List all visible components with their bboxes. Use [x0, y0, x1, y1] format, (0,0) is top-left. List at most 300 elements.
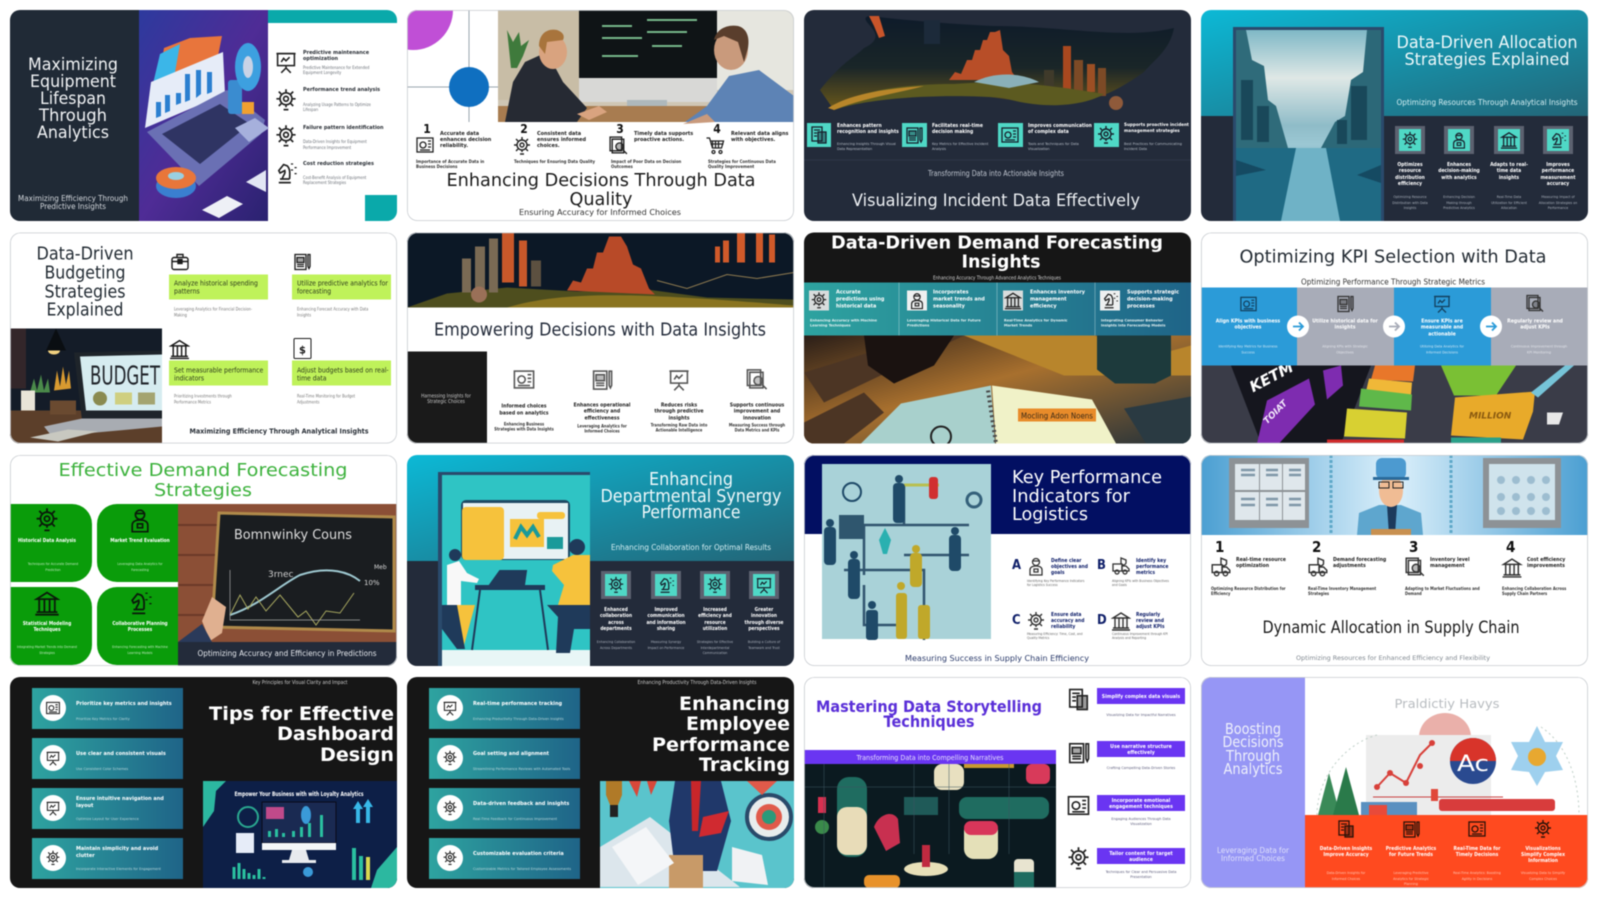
image: analytics illustration: Ac — [1457, 752, 1489, 777]
subtitle: Ensuring Accuracy for Informed Choices — [519, 208, 681, 217]
title: Enhancing Decisions Through Data — [446, 170, 756, 191]
title: Through — [1225, 747, 1280, 765]
item: Failure pattern identification: Failure pattern identification — [303, 125, 384, 131]
card: Optimizing KPI Selection with Data — [1201, 232, 1588, 444]
step 3 — [1420, 296, 1465, 354]
card: Visualizing Incident Data Effectively — [804, 10, 1191, 221]
panel: black side box: Harnessing Insights for — [421, 394, 471, 400]
item 3: Real-Time Data for — [1454, 846, 1501, 852]
item 2: Leveraging Predictive — [1394, 871, 1428, 875]
feature 1: Enhancing Accuracy with Machine — [810, 318, 878, 322]
title: Data-Driven — [36, 244, 134, 264]
item 1: optimization — [1236, 563, 1269, 569]
item D: adjust KPIs — [1136, 624, 1165, 630]
card: Effective Demand Forecasting Strategies — [10, 455, 397, 666]
tip 3 — [32, 788, 183, 829]
item 3 — [651, 371, 708, 432]
item 4: Teamwork and Trust — [748, 646, 780, 650]
item 3: Agility in Decisions — [1462, 877, 1493, 881]
footer text: Measuring Success in Supply Chain Efficiency — [905, 654, 1090, 663]
title: Design — [320, 744, 394, 766]
title: Visualizing Incident Data Effectively — [852, 191, 1140, 211]
item 1: across — [608, 620, 624, 626]
panel: black side box — [407, 352, 487, 444]
item: Predictive maintenance: Predictive Maintenance for Extended — [303, 65, 369, 70]
item 2: Enhancing Decision — [1443, 195, 1475, 199]
item C: Measuring Efficiency: Time, Cost, and — [1027, 632, 1083, 636]
item: Performance trend analysis: Performance trend analysis — [303, 87, 380, 93]
feature 2: Leveraging Historical Data for Future — [907, 318, 981, 322]
item 2: Leveraging Analytics for — [577, 424, 627, 428]
step 2: Aligning KPIs with Strategic — [1322, 344, 1368, 348]
step 2: Utilize historical data for — [1312, 318, 1378, 324]
step 3: Utilizing Data Analytics for — [1420, 344, 1465, 348]
tip 4 — [429, 838, 580, 879]
item 4: Supply Chain Partners — [1502, 591, 1547, 596]
title: Analytics — [37, 123, 109, 143]
step 3: measurable and — [1421, 324, 1463, 330]
card: Boosting Decisions Through Analytics — [1201, 677, 1588, 888]
feature 4: decision-making — [1127, 296, 1173, 302]
title — [1396, 33, 1578, 70]
item: historical spending: patterns — [174, 288, 200, 296]
item: performance indicators: Set measurable performance — [174, 366, 263, 374]
image: businessman on package with target — [600, 781, 794, 888]
item 4: Techniques for Clear and Persuasive Data — [1106, 869, 1176, 874]
item 3: through predictive — [654, 408, 704, 414]
title: Maximizing — [28, 55, 118, 75]
feature 4: Insights into Forecasting Models — [1101, 322, 1165, 328]
item 3: 3 — [1409, 538, 1418, 556]
item 4 — [706, 122, 788, 170]
title: Decisions — [1222, 733, 1284, 751]
step 4: KPI Monitoring — [1527, 350, 1551, 354]
image: engineer and screens — [1201, 455, 1588, 535]
item 3: of complex data — [1028, 129, 1069, 135]
step 4: adjust KPIs — [1520, 324, 1550, 330]
item 3: Interdepartmental — [701, 646, 730, 650]
item: predictive analytics: forecasting — [297, 288, 331, 296]
item 2 — [1386, 822, 1437, 886]
item 3 — [697, 571, 733, 655]
title: Dynamic Allocation in Supply Chain — [1262, 618, 1520, 638]
image: data landscape — [407, 232, 794, 308]
tip 1: Enhancing Productivity Through Data-Driven Insights — [473, 716, 564, 721]
item: adjust budgets: time data — [297, 374, 327, 382]
item C: reliability — [1051, 624, 1075, 630]
item 2: for Future Trends — [1389, 852, 1433, 858]
item B: B — [1097, 558, 1106, 573]
card: Data-Driven Allocation Strategies — [1201, 10, 1588, 221]
item 1 — [1211, 538, 1286, 596]
panel: teal features band — [804, 282, 1191, 336]
item 3: Allocation — [1501, 206, 1517, 210]
step 4 — [1507, 296, 1567, 354]
feature 2: market trends and — [933, 296, 985, 302]
title: Performance — [652, 734, 790, 756]
panel: dark caption bar — [178, 642, 397, 666]
feature 2: Predictions — [907, 322, 929, 328]
title: Dashboard — [277, 723, 394, 745]
item 4: audience — [1129, 857, 1153, 863]
item 1: Enhanced — [604, 607, 628, 613]
item: historical spending: Analyze historical spending — [174, 280, 258, 288]
item 3: Adapting to Market Fluctuations and — [1405, 586, 1480, 591]
feature 1: predictions using — [836, 296, 885, 302]
title: Strategies — [154, 480, 252, 501]
item 2: Planning — [1404, 882, 1418, 886]
title: Budgeting — [44, 262, 126, 284]
title: Strategies — [44, 282, 126, 302]
item 1: departments — [600, 626, 632, 632]
item 4: Building a Culture of — [748, 640, 781, 644]
item C: Ensure data — [1051, 612, 1081, 618]
item 3: management — [1430, 563, 1465, 569]
item B: Aligning KPIs with Business Objectives — [1112, 579, 1169, 583]
image: budget laptop on desk: BUDGET — [90, 362, 160, 392]
item 1: 1 — [423, 122, 431, 136]
item 3: Engaging Audiences Through Data — [1111, 816, 1171, 821]
item 1 — [1070, 688, 1185, 717]
tip 4: Incorporate Interactive Elements for Engagement — [76, 866, 162, 871]
item 4: Information — [1528, 858, 1558, 864]
item D: review and — [1136, 618, 1164, 624]
feature 2: seasonality — [933, 304, 966, 310]
item 4: innovation — [743, 416, 771, 422]
item 4: Improves — [1546, 162, 1570, 168]
tip 4: Maintain simplicity and avoid — [76, 846, 159, 852]
title — [36, 244, 134, 320]
decoration: purple circle — [406, 10, 454, 51]
item 4: Supports continuous — [730, 402, 785, 408]
title — [816, 697, 1042, 731]
title: Techniques — [884, 712, 974, 731]
item: performance indicators — [169, 341, 268, 404]
item 4: Tailor content for target — [1109, 851, 1173, 857]
item 4: Incident Data — [1124, 146, 1147, 151]
item: Performance trend analysis: Lifespan — [303, 107, 318, 112]
image: KPI colored blocks: KETM — [1246, 358, 1296, 396]
tip 4: clutter — [76, 853, 95, 859]
item A: A — [1012, 558, 1021, 573]
panel: Collaborative Planning Processes: Enhancing Forecasting with Machine — [112, 645, 168, 649]
panel: Statistical Modeling Techniques: Strategies — [39, 651, 55, 655]
feature 3: Real-Time Analytics for Dynamic — [1004, 318, 1067, 322]
item 3: time data — [1497, 168, 1521, 174]
item 1: Data-Driven Insights for — [1327, 871, 1366, 875]
card: Enhancing Employee Performance Tracking — [407, 677, 794, 888]
title: Employee — [686, 713, 790, 735]
image: data city illustration — [804, 764, 1056, 888]
item 2: Analytics for Strategic — [1393, 877, 1429, 881]
item: Failure pattern identification: Data-Driven Insights for Equipment — [303, 139, 367, 144]
title — [600, 470, 782, 523]
card: Empowering Decisions with Data Insights — [407, 232, 794, 444]
item 3 — [1405, 538, 1480, 596]
tip 1: Prioritize key metrics and insights — [76, 701, 172, 707]
card: Dynamic Allocation in Supply Chain — [1201, 455, 1588, 666]
item 2: sharing — [657, 626, 675, 632]
item 1: Enhancing Collaboration — [597, 640, 635, 644]
item 2 — [574, 371, 631, 434]
item 2 — [902, 123, 989, 151]
item 2: with analytics — [1441, 175, 1477, 181]
item 1: efficiency — [1398, 181, 1422, 187]
item 3 — [998, 123, 1092, 151]
item 3: Real-Time Data — [1497, 195, 1521, 199]
panel: Historical Data Analysis: Prediction — [45, 568, 61, 572]
image: loyalty analytics dashboard: Empower Your Business with with Loyalty Analytics — [234, 791, 364, 798]
item 1 — [1320, 821, 1373, 881]
item 2: decision-making — [1438, 168, 1480, 174]
item 1: Improve Accuracy — [1323, 852, 1369, 858]
decoration: teal corner block — [365, 195, 397, 221]
card: Tips for Effective Dashboard Design — [10, 677, 397, 888]
item 4: Simplify Complex — [1521, 852, 1565, 858]
item: adjust budgets: Adjust budgets based on real- — [297, 366, 389, 374]
item 4: Enhancing Collaboration Across — [1502, 586, 1566, 591]
panel: Statistical Modeling Techniques: Statistical Modeling — [23, 621, 71, 627]
item 1: resource — [1399, 168, 1421, 174]
item 4: Quality Improvement — [708, 164, 754, 170]
item D: D — [1097, 613, 1107, 628]
item 4: Cost efficiency — [1527, 557, 1565, 563]
item 2: Impact on Performance — [648, 646, 684, 650]
item 3: Adapts to real- — [1490, 162, 1528, 168]
item: Cost reduction strategies: Cost reduction strategies — [303, 161, 374, 167]
subtitle — [1217, 846, 1290, 863]
tip 2 — [429, 738, 580, 779]
item 2 — [1308, 538, 1386, 596]
image: loyalty analytics dashboard — [203, 781, 397, 888]
panel: dark title sidebar — [10, 10, 139, 221]
panel: dark caption bar: Optimizing Accuracy and Efficiency in Predictions — [198, 649, 377, 658]
item 4: Presentation — [1130, 874, 1152, 879]
decoration: blue circle — [449, 67, 489, 107]
item 1: Visualizing Data for Impactful Narratives — [1106, 712, 1176, 717]
item 4: improvements — [1527, 563, 1565, 569]
footer text: Maximizing Efficiency Through Analytical Insights — [190, 428, 368, 436]
item: predictive analytics: Enhancing Forecast Accuracy with Data — [297, 306, 368, 312]
item: performance indicators: indicators — [174, 374, 204, 382]
panel: Historical Data Analysis: Historical Data Analysis — [18, 538, 76, 544]
item 3: Demand — [1405, 591, 1422, 596]
image: KPI colored blocks: TOIAT — [1262, 398, 1291, 427]
item 2: and information — [646, 620, 686, 626]
tip 4: Customizable evaluation criteria — [473, 851, 564, 857]
title: Insights — [962, 252, 1040, 272]
item 2: Consistent data — [537, 131, 581, 137]
tip 2: Use clear and consistent visuals — [76, 751, 166, 757]
panel: Market Trend Evaluation: Forecasting — [131, 568, 149, 572]
item 1: distribution — [1395, 175, 1425, 181]
title: Performance — [642, 503, 740, 523]
item 1: Optimizing Resource Distribution for — [1211, 586, 1286, 591]
card: Maximizing Equipment Lifespan — [10, 10, 397, 221]
item 4: measurement — [1540, 175, 1576, 181]
item 2: Predictive Analytics — [1386, 846, 1437, 852]
item 3: insights — [1499, 175, 1519, 181]
item: predictive analytics: Insights — [297, 312, 311, 318]
item 2: Informed Choices — [584, 428, 620, 434]
step 3: Informed Decisions — [1426, 350, 1458, 354]
item 4: Best Practices for Communicating — [1124, 141, 1182, 146]
item 2: effectively — [1127, 750, 1155, 756]
item 2: Measuring Synergy — [651, 640, 681, 644]
item 1: recognition and insights — [837, 129, 899, 135]
step 1: Success — [1241, 350, 1255, 354]
subtitle — [18, 194, 128, 211]
item 3: Increased — [703, 607, 727, 613]
item 1: Optimizing Resource — [1393, 195, 1427, 199]
title: Enhancing — [649, 470, 733, 490]
item: adjust budgets — [292, 338, 391, 404]
item 4: Visualizing Data to Simplify — [1521, 871, 1565, 875]
item 4: performance — [1542, 168, 1574, 174]
panel: Market Trend Evaluation: Market Trend Evaluation — [110, 538, 170, 544]
item 4 — [1502, 538, 1566, 596]
title — [831, 234, 1163, 272]
item 3: Outcomes — [611, 164, 633, 170]
item 4: Visualizations — [1525, 846, 1561, 852]
step 4: Regularly review and — [1507, 318, 1563, 324]
title — [28, 55, 118, 143]
decoration: teal top bar — [268, 10, 397, 23]
item: Predictive maintenance — [303, 50, 370, 75]
item 4: management strategies — [1124, 128, 1180, 134]
item D — [1097, 612, 1168, 640]
item: adjust budgets: Real-Time Monitoring for Budget — [297, 394, 356, 398]
feature 4: Supports strategic — [1127, 290, 1179, 296]
title: Lifespan — [40, 89, 106, 109]
item: Predictive maintenance: optimization — [303, 56, 339, 62]
item 2 — [1438, 126, 1480, 210]
item 4 — [1094, 122, 1189, 151]
item 1 — [1392, 126, 1428, 210]
panel: Statistical Modeling Techniques: Integrating Market Trends into Demand — [17, 645, 77, 649]
panel: black side box: Strategic Choices — [427, 399, 466, 405]
panel: Market Trend Evaluation: Leveraging Data Analytics for — [117, 562, 163, 566]
title: Data-Driven Allocation — [1396, 33, 1578, 53]
subtitle band: Transforming Data into Compelling Narratives — [856, 754, 1004, 762]
item 4: Data Metrics and KPIs — [735, 428, 779, 432]
arrow 3 — [1480, 316, 1502, 338]
icon: presentation board — [276, 54, 296, 73]
item 1: Enhances pattern — [837, 123, 882, 129]
item C: C — [1012, 613, 1021, 628]
item: Cost reduction strategies: Replacement Strategies — [303, 180, 346, 185]
image: KPI colored blocks — [1201, 358, 1588, 444]
item 3: engagement techniques — [1109, 804, 1173, 810]
panel: orange-red band — [1305, 815, 1588, 888]
item 2: effectiveness — [585, 416, 620, 422]
item: Performance trend analysis — [303, 87, 380, 112]
item 4: with objectives. — [731, 137, 775, 143]
image: chalkboard forecast: 3rnec — [268, 570, 294, 580]
item: historical spending: Leveraging Analytics for Financial Decision- — [174, 306, 253, 312]
item 4: Performance — [1548, 206, 1568, 210]
item 2 — [1070, 741, 1185, 770]
step 1: Align KPIs with business — [1216, 318, 1280, 324]
item 1: reliability. — [440, 143, 468, 149]
item: Cost reduction strategies: Cost-Benefit Analysis of Equipment — [303, 175, 367, 180]
subtitle: Key Principles for Visual Clarity and Impact — [252, 680, 348, 686]
title: Mastering Data Storytelling — [816, 697, 1042, 716]
tip 3: Data-driven feedback and insights — [473, 801, 569, 807]
item 4: through diverse — [745, 620, 784, 626]
item 3: Timely Decisions — [1456, 852, 1499, 858]
item 2: efficiency and — [584, 408, 620, 414]
item 1: Business Decisions — [416, 164, 458, 170]
item 2: 2 — [520, 122, 528, 136]
item 3: utilization — [703, 626, 727, 632]
item 3: Actionable Intelligence — [656, 428, 703, 432]
item 1: Optimizes — [1397, 162, 1423, 168]
feature 1: Accurate — [836, 290, 861, 296]
item B: performance — [1136, 564, 1168, 570]
card: Mastering Data Storytelling Techniques — [804, 677, 1191, 888]
item D: Analysis and Reporting — [1112, 636, 1146, 640]
item A — [1012, 558, 1088, 587]
item B: metrics — [1136, 570, 1155, 576]
icon: ring gear — [276, 125, 296, 146]
item: Predictive maintenance: Predictive maintenance — [303, 50, 370, 56]
title: Tracking — [699, 754, 790, 776]
title — [1012, 467, 1162, 525]
title: Equipment — [30, 72, 116, 92]
image: team at dashboard illustration — [438, 472, 590, 666]
feature 2: Incorporates — [933, 290, 969, 296]
title — [209, 703, 394, 766]
item 2: Enhances — [1447, 162, 1471, 168]
item 1: collaboration — [600, 613, 632, 619]
tip 3: layout — [76, 803, 94, 809]
panel: Statistical Modeling Techniques: Techniques — [33, 627, 61, 633]
item 4: Greater — [755, 607, 774, 613]
item 4: Complex Choices — [1529, 877, 1557, 881]
item 3: insights — [669, 416, 690, 422]
item 1 — [807, 123, 899, 151]
item 1: Informed choices — [501, 404, 547, 410]
arrow 2 — [1383, 316, 1405, 338]
panel: Collaborative Planning Processes: Processes — [128, 627, 153, 633]
item 1: Insights — [1404, 206, 1417, 210]
image: chalkboard forecast: 10% — [364, 579, 380, 587]
feature 3 — [1003, 290, 1086, 328]
step 2: insights — [1335, 324, 1356, 330]
item 2: Improved — [654, 607, 678, 613]
item: adjust budgets: Adjustments — [297, 400, 320, 404]
item 2: Strategies — [1308, 591, 1329, 596]
subtitle: Leveraging Data for — [1217, 846, 1290, 855]
item 2 — [646, 571, 686, 650]
card: Enhancing Departmental Synergy Performance — [407, 455, 794, 666]
item: Predictive maintenance: Equipment Longevity — [303, 70, 342, 75]
item 2: Techniques for Ensuring Data Quality — [514, 159, 595, 165]
item 1: Strategies with Data Insights — [494, 426, 554, 432]
item 2: Demand forecasting — [1333, 557, 1386, 563]
item 4: perspectives — [748, 626, 780, 632]
item 1: Distribution with Data — [1392, 201, 1428, 205]
item 3: Inventory level — [1430, 557, 1470, 563]
item 4 — [729, 370, 786, 432]
image: budget laptop on desk — [10, 328, 162, 444]
arrow 1 — [1287, 316, 1309, 338]
item 4: innovation — [751, 613, 777, 619]
tip 1 — [429, 688, 580, 729]
panel: Collaborative Planning Processes: Learning Models — [128, 651, 153, 655]
item 1: Importance of Accurate Data in — [416, 159, 485, 165]
